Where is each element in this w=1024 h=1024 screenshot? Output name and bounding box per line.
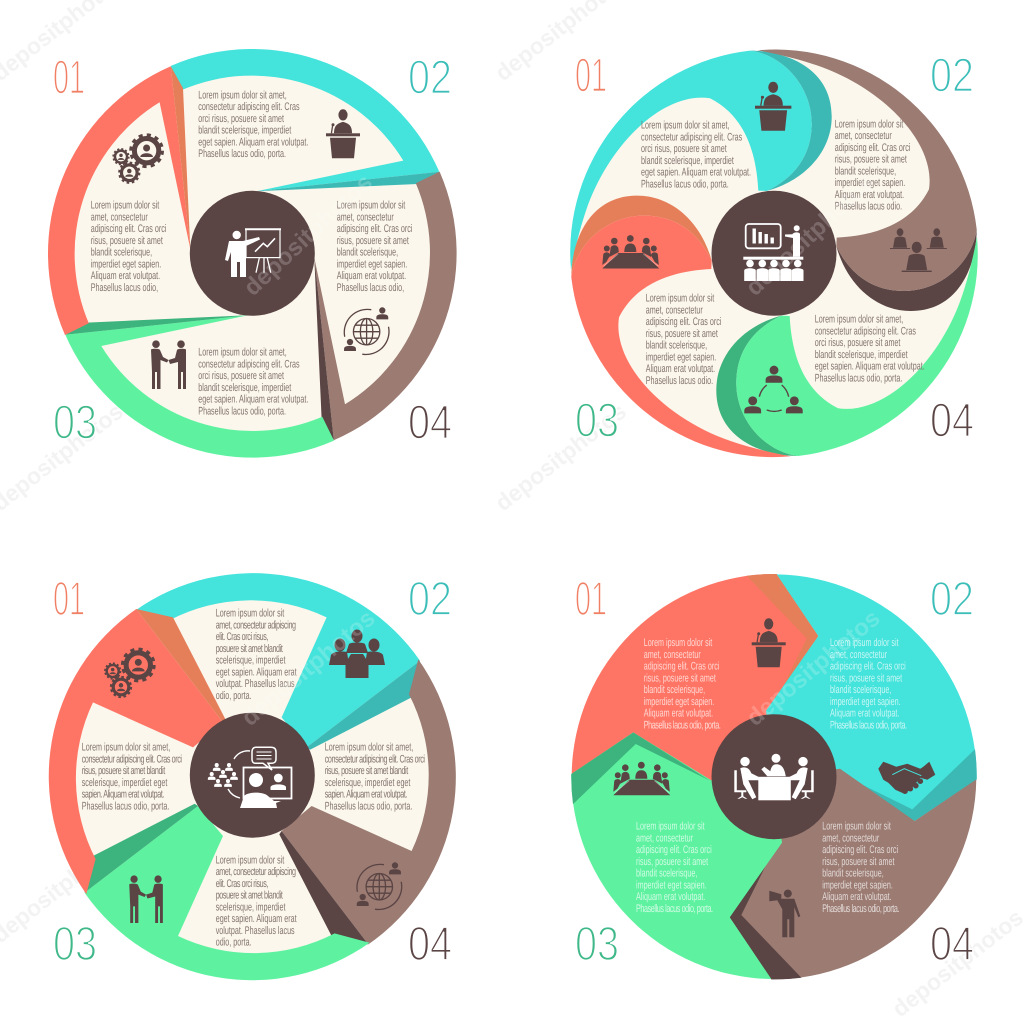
text block 01: Aliquam erat volutpat. [644,708,713,720]
text block 01: amet, consectetur [91,211,148,223]
icon: meeting table [613,762,670,795]
icon: gears [105,650,154,697]
numbers: 03 [575,918,619,971]
text block 01: Lorem ipsum dolor sit amet, [641,120,729,132]
text block 01: amet, consectetur [644,649,701,661]
text block 04: amet, consectetur [337,211,394,223]
icon: handshake people [129,875,163,923]
circle segments [570,50,978,457]
numbers: 01 [575,50,607,103]
text block 01: Aliquam erat volutpat. [91,270,160,282]
text block 01: Lorem ipsum dolor sit [644,637,712,649]
text block 01: eget sapien. Aliquam erat volutpat. [641,167,751,179]
text block 02: Lorem ipsum dolor sit [830,637,899,649]
icon: trainer at chart [225,229,281,277]
text block 03: Aliquam erat volutpat. [646,363,715,375]
text block 04: orci risus, posuere sit amet [815,337,900,349]
text block 02: odio, porta. [216,690,252,702]
text block 04: Lorem ipsum dolor sit [822,821,891,833]
icon: team triangle [744,366,803,413]
icon: man with megaphone [769,890,800,937]
text block 04: adipiscing elit. Cras orci [822,844,898,856]
numbers: 01 [575,573,607,626]
icon: online support [208,747,292,808]
text block 03: Phasellus lacus odio. [646,375,713,387]
text block 03: Phasellus lacus odio, porta. [636,903,713,915]
text block 04: consectetur adipiscing elit. Cras [815,325,916,337]
text block 02: Phasellus lacus odio. [835,201,902,213]
numbers: 02 [408,573,452,626]
numbers: 03 [575,395,619,448]
numbers [575,573,974,971]
text block 01: blandit scelerisque, imperdiet [641,155,734,167]
numbers: 03 [53,918,97,971]
text block 01: scelerisque, imperdiet eget [82,777,167,789]
watermark: depositphotos [741,169,880,301]
background watermarks: depositphotos [887,904,1024,1022]
text block 02: Aliquam erat volutpat. [835,189,904,201]
text block 04: blandit scelerisque, [337,247,398,259]
text block 03: Aliquam erat volutpat. [636,891,705,903]
text block 02: orci risus, posuere sit amet [198,113,284,125]
text block 01: Phasellus lacus odio, porta. [641,178,729,190]
numbers: 04 [408,918,452,971]
text block 01: risus, posuere sit amet [644,672,716,684]
text block 04: risus, posuere sit amet [337,235,409,247]
text block 01: imperdiet eget sapien. [644,696,714,708]
text block 03: orci risus, posuere sit amet [198,370,284,382]
numbers: 01 [53,51,85,104]
text block 03: scelerisque, imperdiet [216,901,285,913]
text block 01: Lorem ipsum dolor sit amet, [82,742,170,754]
numbers: 02 [930,573,974,626]
text block 02: Lorem ipsum dolor sit [835,118,903,130]
icon: podium [752,618,786,667]
numbers [53,51,452,449]
text block 03: Lorem ipsum dolor sit amet, [198,347,287,359]
icon: clasped hands [878,762,935,794]
text block 03: posuere sit amet blandit [216,890,283,902]
text block 04: adipiscing elit. Cras orci [337,223,412,235]
numbers: 03 [53,396,97,449]
text block 04: amet, consectetur [822,832,880,844]
text block 04: eget sapien. Aliquam erat volutpat. [815,361,925,373]
icon: people at laptops [890,228,947,272]
text block 04: consectetur adipiscing elit. Cras orci [325,753,425,765]
text block 01: sapien. Aliquam erat volutpat. [82,789,164,801]
text block 03: Lorem ipsum dolor sit [636,821,705,833]
text block 02: blandit scelerisque, [835,165,896,177]
text block 01: blandit scelerisque, [91,247,152,259]
numbers: 01 [53,573,85,626]
text block 04: Aliquam erat volutpat. [822,891,892,903]
text block 04: Phasellus lacus odio, porta. [815,372,902,384]
numbers: 04 [930,918,974,971]
text block 01: Phasellus lacus odio, porta. [644,719,721,731]
text block 03: blandit scelerisque, [636,868,697,880]
text block 04: Phasellus lacus odio, porta. [325,800,412,812]
text block 02: amet, consectetur [830,649,887,661]
icon: globe with people [344,307,389,355]
text block 04: Phasellus lacus odio, porta. [822,903,899,915]
text block 03: odio, porta. [216,937,252,949]
numbers: 04 [930,395,974,448]
numbers [53,573,452,971]
numbers: 02 [408,51,452,104]
icon: people at table [734,754,814,800]
text block 03: eget sapien. Aliquam erat [216,913,297,925]
circle segments [571,574,977,979]
text block 03: Lorem ipsum dolor sit [646,293,714,305]
text block 03: elit. Cras orci risus, [216,878,268,890]
numbers: 04 [408,396,452,449]
text block 03: Lorem ipsum dolor sit [216,854,284,866]
text block 03: blandit scelerisque, [646,340,707,352]
icon: globe with people [357,862,402,910]
text block 04: sapien. Aliquam erat volutpat. [325,789,407,801]
background watermarks: depositphotos [490,398,631,516]
text block 03: blandit scelerisque, imperdiet [198,382,291,394]
numbers [575,50,974,448]
text block 02: risus, posuere sit amet [835,154,907,166]
numbers: 02 [930,50,974,103]
text block 03: adipiscing elit. Cras orci [646,316,721,328]
text block 02: elit. Cras orci risus, [216,631,268,643]
text block 03: consectetur adipiscing elit. Cras [198,358,300,370]
text block 01: Lorem ipsum dolor sit [91,200,159,212]
text block 02: eget sapien. Aliquam erat volutpat. [198,136,308,148]
panel: bottom-right arrow diagram [571,573,977,979]
text block 01: imperdiet eget sapien. [91,258,161,270]
text block 02: eget sapien. Aliquam erat [216,666,297,678]
text block 02: imperdiet eget sapien. [835,177,905,189]
text block 01: Phasellus lacus odio, [91,282,158,294]
text block 01: adipiscing elit. Cras orci [91,223,166,235]
text block 04: scelerisque, imperdiet eget [325,777,410,789]
text block 01: blandit scelerisque, [644,684,705,696]
text block 03: imperdiet eget sapien. [646,351,716,363]
watermark: depositphotos [237,605,381,732]
text block 02: Phasellus lacus odio, porta. [198,148,286,160]
text block 04: imperdiet eget sapien. [337,258,407,270]
text block 02: posuere sit amet blandit [216,643,283,655]
text block 03: risus, posuere sit amet [636,856,708,868]
text block 02: adipiscing elit. Cras orci [835,142,910,154]
text block 03: Phasellus lacus odio, porta. [198,405,286,417]
text block 04: risus, posuere sit amet blandit [325,765,408,777]
text block 04: blandit scelerisque, imperdiet [815,349,908,361]
text block 03: amet, consectetur adipiscing [216,866,296,878]
text block 01: adipiscing elit. Cras orci [644,660,719,672]
text block 02: blandit scelerisque, imperdiet [198,125,291,137]
text block 02: Lorem ipsum dolor sit amet, [198,89,287,101]
text block 04: Lorem ipsum dolor sit amet, [815,314,903,326]
text block 02: amet, consectetur [835,130,892,142]
text block 03: amet, consectetur [636,832,693,844]
text block 03: amet, consectetur [646,304,703,316]
text block 04: Lorem ipsum dolor sit amet, [325,742,413,754]
panel: bottom-left wheel diagram [49,573,456,980]
icon: podium [755,82,791,131]
text block 02: amet, consectetur adipiscing [216,619,296,631]
text block 02: adipiscing elit. Cras orci [830,660,906,672]
watermark: depositphotos [239,169,378,301]
text block 02: Aliquam erat volutpat. [830,708,899,720]
panel: top-left shutter diagram [48,49,457,458]
text block 02: scelerisque, imperdiet [216,655,285,667]
text block 01: risus, posuere sit amet blandit [82,765,165,777]
text block 03: adipiscing elit. Cras orci [636,844,712,856]
text block 03: volutpat. Phasellus lacus [216,925,295,937]
circle segments [49,573,456,980]
text block 01: risus, posuere sit amet [91,235,163,247]
text block 01: orci risus, posuere sit amet [641,143,727,155]
text block 02: volutpat. Phasellus lacus [216,678,295,690]
text block 02: consectetur adipiscing elit. Cras [198,101,300,113]
text block 04: risus, posuere sit amet [822,856,894,868]
icon: podium [326,109,360,158]
icon: handshake people [151,340,186,389]
text block 01: consectetur adipiscing elit. Cras [641,131,743,143]
icon: meeting table [602,235,659,268]
text block 02: Lorem ipsum dolor sit [216,608,284,620]
text block 03: eget sapien. Aliquam erat volutpat. [198,394,308,406]
text block 01: consectetur adipiscing elit. Cras orci [82,753,182,765]
icon: presenter with audience [743,224,804,281]
text block 04: Lorem ipsum dolor sit [337,200,405,212]
text block 04: Phasellus lacus odio, [337,282,404,294]
text block 02: risus, posuere sit amet [830,672,902,684]
text block 02: Phasellus lacus odio, porta. [830,719,907,731]
text block 04: imperdiet eget sapien. [822,879,893,891]
text block 02: blandit scelerisque, [830,684,891,696]
text block 02: imperdiet eget sapien. [830,696,901,708]
text block 04: blandit scelerisque, [822,868,884,880]
text block 03: imperdiet eget sapien. [636,879,707,891]
icon: gears [113,135,162,183]
text block 03: risus, posuere sit amet [646,328,718,340]
panel: top-right swirl diagram [570,50,978,457]
text block 04: Aliquam erat volutpat. [337,270,406,282]
watermark: depositphotos [742,605,886,732]
circle segments [48,49,457,458]
text block 01: Phasellus lacus odio, porta. [82,800,169,812]
icon: team [329,630,385,678]
